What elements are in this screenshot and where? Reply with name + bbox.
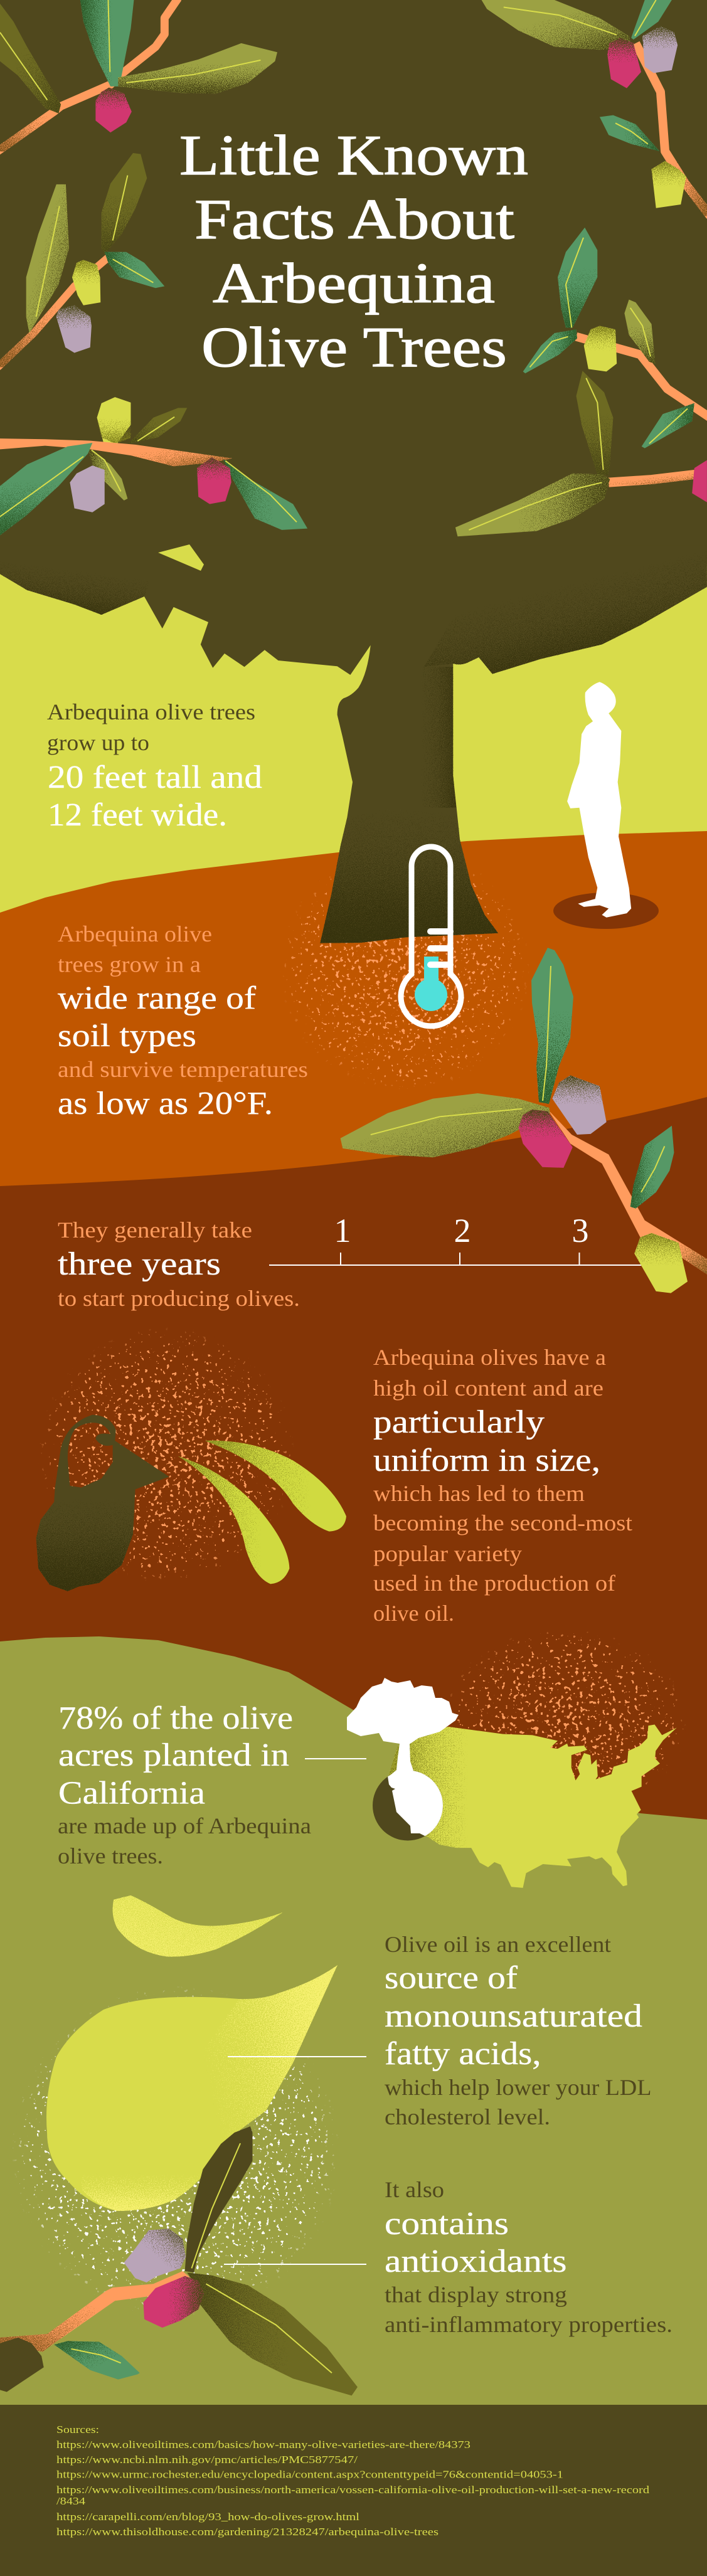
leaf: green large (0, 443, 92, 536)
fact: fatty acids: Olive oil is an excellent (385, 1932, 611, 1957)
leaf: green (105, 252, 164, 288)
ticks (430, 931, 450, 965)
fact: california acres: are made up of Arbequina (58, 1813, 311, 1838)
fact: california acres (58, 1700, 311, 1868)
branch cluster: centre right (341, 948, 707, 1275)
leaf: olive (341, 1093, 550, 1157)
title: Facts About (194, 188, 514, 251)
fact: fatty acids: fatty acids, (385, 2036, 541, 2072)
brown ground (0, 1097, 707, 1850)
leaf: olive small (624, 300, 655, 364)
leaf: dark olive (102, 153, 147, 254)
US map (389, 1725, 677, 1888)
olive: yellow (652, 161, 686, 208)
olive: lilac (642, 26, 678, 73)
fact: antioxidants: contains (385, 2206, 509, 2242)
olive: lilac (124, 2229, 186, 2282)
olive: yellow (72, 260, 100, 305)
branch cluster: bottom left (0, 2126, 358, 2395)
california olive (373, 1768, 444, 1840)
olive green ground (0, 1636, 707, 2409)
branch cluster: top left (0, 0, 277, 151)
title: Arbequina (213, 252, 495, 315)
leaf: green right (223, 459, 307, 530)
sources: https://www.thisoldhouse.com/gardening/21328247/arbequina-olive-trees (56, 2526, 439, 2538)
branch (635, 43, 707, 216)
olive: pink (197, 457, 231, 504)
yellow canopy gap (158, 544, 204, 571)
leaf: green small (523, 329, 577, 373)
olive: pink (607, 38, 641, 88)
burnt orange ground (0, 831, 707, 1254)
fact: california acres: acres planted in (58, 1737, 289, 1773)
spray: around jug (38, 1327, 295, 1584)
leaf: green narrow (631, 0, 672, 40)
branch (0, 2271, 189, 2351)
fact: oil content: olive oil. (373, 1601, 454, 1626)
sources: /8434 (56, 2495, 86, 2507)
fact: soil and temperature: and survive temperatures (58, 1057, 308, 1082)
leaf: green (80, 0, 134, 87)
olive: dark (0, 2338, 44, 2392)
olive: pink (692, 460, 707, 502)
fact: soil and temperature: trees grow in a (58, 952, 201, 977)
oil jug (36, 1415, 346, 1591)
fact: soil and temperature: as low as 20°F. (58, 1086, 273, 1121)
leaf: olive large (455, 474, 610, 536)
leaf: dark olive large (187, 2272, 358, 2395)
fact: soil and temperature: Arbequina olive (58, 921, 212, 946)
yellow sky band (0, 564, 707, 941)
fact: oil content: Arbequina olives have a (373, 1345, 606, 1370)
leaf: green (600, 115, 659, 151)
fact: tree size (47, 699, 262, 833)
fact: three years: to start producing olives. (58, 1286, 300, 1311)
timeline axis: 3 (572, 1212, 588, 1249)
fact: antioxidants: that display strong (385, 2282, 567, 2307)
fact: fatty acids: source of (385, 1960, 518, 1996)
fact: tree size: grow up to (47, 730, 149, 755)
branch (548, 1110, 707, 1275)
leaf: green tall (558, 228, 597, 327)
spray: soil around thermometer (279, 847, 530, 1091)
mercury (415, 957, 447, 1011)
sources: https://www.oliveoiltimes.com/business/north-america/vossen-california-olive-oil-production-will-set-a-new-record (56, 2484, 650, 2496)
oil drop: large (46, 1965, 338, 2211)
fact: oil content: high oil content and are (373, 1375, 603, 1401)
olive: lilac (56, 305, 92, 353)
oil drops (178, 1441, 346, 1584)
leaf: dark olive small (129, 408, 187, 443)
fact: antioxidants: It also (385, 2177, 444, 2202)
fact: antioxidants: anti-inflammatory properties. (385, 2312, 672, 2337)
fact: three years: They generally take (58, 1217, 252, 1243)
sources: https://www.ncbi.nlm.nih.gov/pmc/articles/PMC5877547/ (56, 2454, 358, 2466)
title: Little Known (179, 124, 528, 187)
fact: fatty acids (385, 1932, 651, 2129)
sources (56, 2424, 650, 2538)
fact: oil content: which has led to them (373, 1481, 585, 1506)
fact: oil content (373, 1345, 632, 1626)
branch (0, 438, 232, 466)
title: Olive Trees (201, 315, 507, 379)
fact: tree size: Arbequina olive trees (47, 699, 255, 724)
timeline axis: 2 (454, 1212, 470, 1249)
olive: yellow (97, 397, 130, 443)
olive: pink (519, 1110, 573, 1168)
line: fatty acids (228, 2056, 366, 2057)
fact: tree size: 20 feet tall and (48, 760, 262, 795)
fact: tree size: 12 feet wide. (48, 797, 227, 833)
person silhouette (567, 682, 631, 918)
leaf: olive (482, 0, 631, 50)
branch (0, 0, 178, 151)
tube (401, 847, 461, 1026)
line: 78 percent (305, 1758, 366, 1759)
fact: oil content: popular variety (373, 1541, 522, 1566)
leaf: green (531, 948, 573, 1104)
fact: fatty acids: cholesterol level. (385, 2104, 550, 2129)
thermometer (401, 847, 461, 1026)
fact: three years (58, 1217, 300, 1311)
olive: pink (95, 87, 132, 132)
sources: https://www.oliveoiltimes.com/basics/how-many-olive-varieties-are-there/84373 (56, 2439, 470, 2451)
branch cluster: middle right (523, 228, 707, 418)
fact: soil and temperature: soil types (58, 1018, 196, 1054)
fact: oil content: particularly (373, 1404, 545, 1440)
fact: antioxidants (385, 2177, 672, 2337)
fact: three years: three years (58, 1246, 221, 1282)
fact: california acres: 78% of the olive (58, 1700, 293, 1736)
fact: soil and temperature (58, 921, 308, 1121)
fact: oil content: becoming the second-most (373, 1510, 632, 1535)
shadow under person (553, 893, 659, 929)
branch cluster: lower right (455, 371, 707, 536)
oil drop: small (113, 1895, 283, 1957)
branch cluster: middle left (0, 153, 164, 367)
sources: https://www.urmc.rochester.edu/encyclopedia/content.aspx?contenttypeid=76&contentid=04053-1 (56, 2469, 563, 2480)
olive: pink (144, 2276, 204, 2328)
dark canopy background (0, 0, 707, 583)
olive: yellow on timeline (634, 1233, 688, 1293)
leaf: dark olive tall (576, 371, 613, 475)
fact: soil and temperature: wide range of (58, 980, 257, 1016)
branch cluster: top right (482, 0, 707, 216)
white tree icon (347, 1678, 459, 1776)
branch cluster: lower left (0, 397, 307, 536)
fact: antioxidants: antioxidants (385, 2244, 567, 2279)
branch (609, 474, 703, 482)
spray: white around olive (11, 1985, 340, 2318)
leaf: green (642, 403, 694, 448)
leaf: olive (118, 43, 277, 93)
leaf: dark narrow (185, 2126, 252, 2272)
branch (576, 337, 707, 418)
olive: yellow (584, 326, 617, 371)
branch (0, 257, 108, 367)
leaf: dark olive (0, 4, 61, 114)
timeline axis (269, 1212, 657, 1265)
leaf: olive (88, 448, 127, 501)
olive: lilac (70, 465, 105, 512)
leaf: green small (630, 1126, 674, 1209)
fact: california acres: olive trees. (58, 1843, 163, 1868)
footer band (0, 2405, 707, 2576)
timeline axis: 1 (334, 1212, 351, 1249)
fact: oil content: uniform in size, (373, 1443, 600, 1478)
title (179, 124, 528, 379)
fact: california acres: California (58, 1775, 205, 1811)
fact: fatty acids: monounsaturated (385, 1998, 642, 2034)
leaf: olive (26, 184, 69, 333)
sources: Sources: (56, 2424, 99, 2436)
line: antioxidants (224, 2264, 366, 2265)
sources: https://carapelli.com/en/blog/93_how-do-olives-grow.html (56, 2511, 359, 2523)
olive: lilac (552, 1075, 607, 1135)
leaf: green small (54, 2341, 140, 2380)
tree canopy and trunk (0, 545, 707, 943)
spray: above US map (442, 1628, 687, 1816)
fact: fatty acids: which help lower your LDL (385, 2075, 651, 2100)
fact: oil content: used in the production of (373, 1571, 615, 1596)
